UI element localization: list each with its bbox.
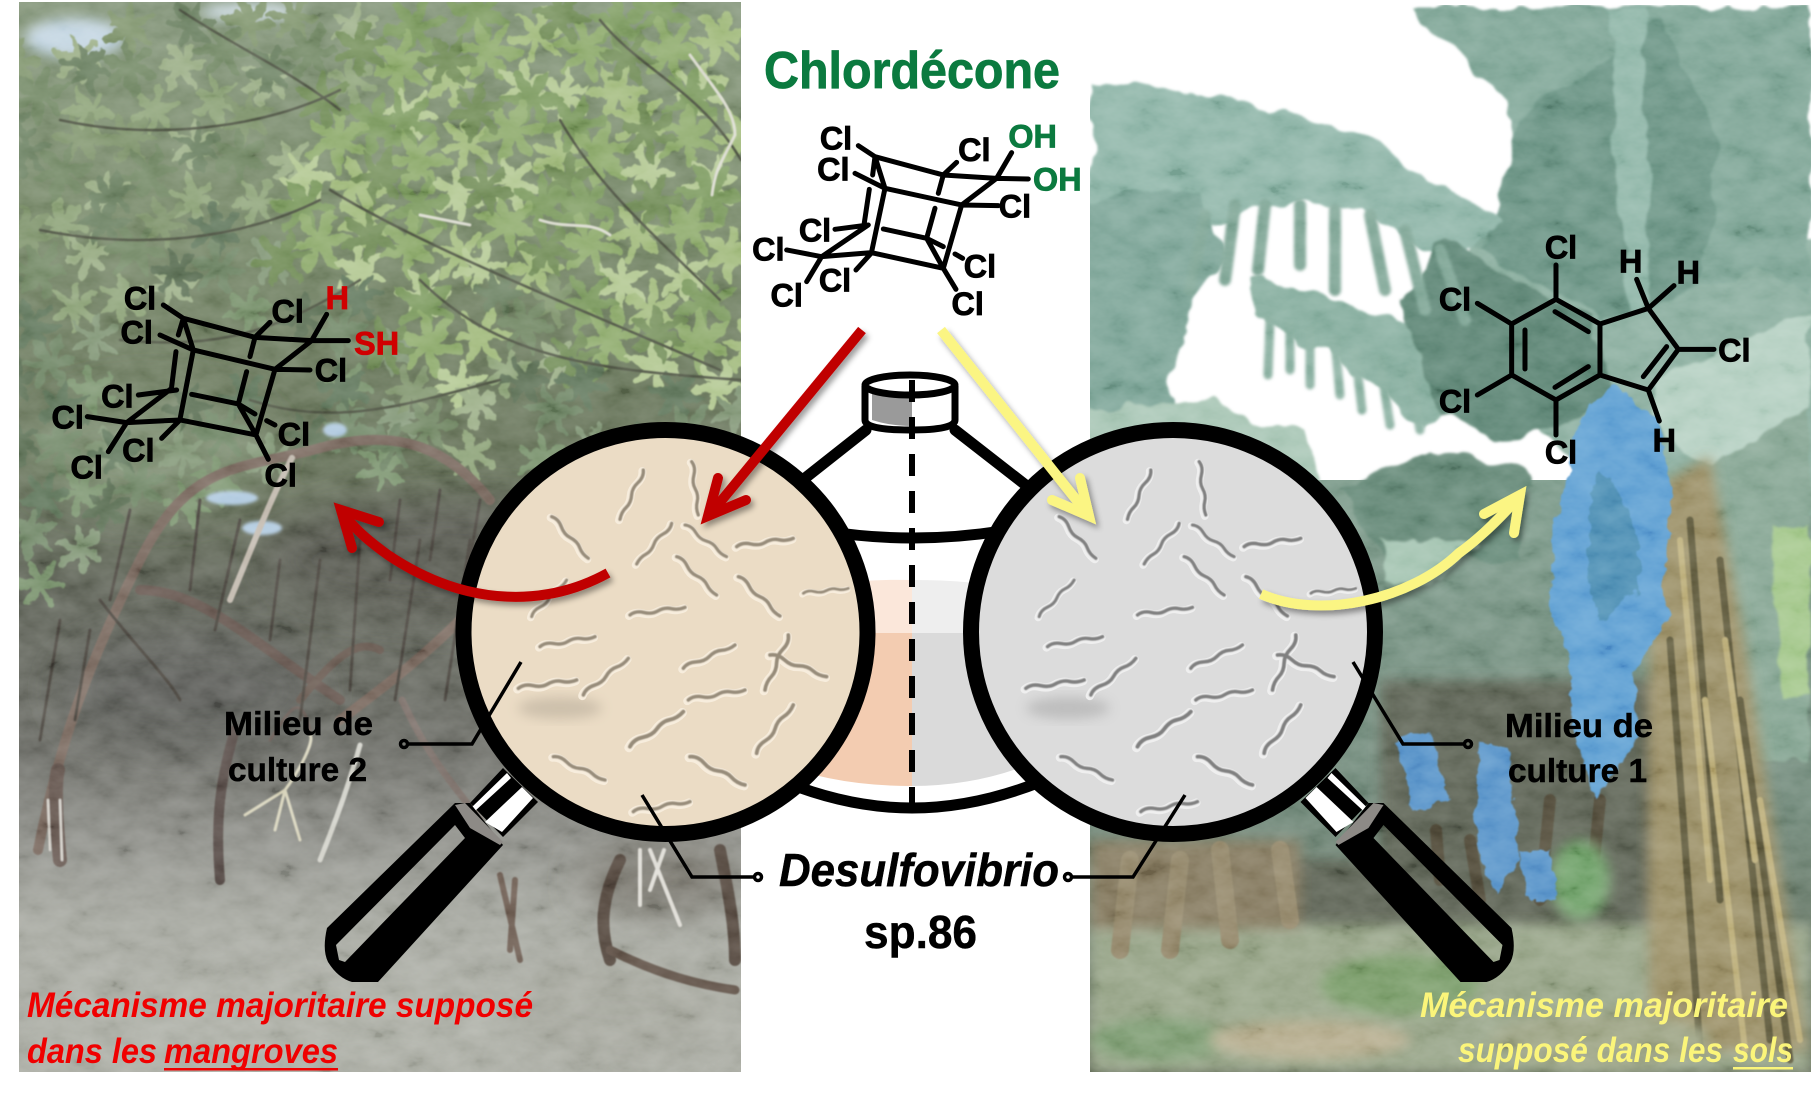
molecule: mangrove product with SH: Cl [122,433,154,469]
icon: left magnifier handle [325,768,538,982]
soft tonal masses of shadows [28,388,741,932]
mangrove roots [38,440,735,990]
molecule: mangrove product with SH: H [326,280,349,316]
arrow: yellow curved out of right lens [1261,495,1520,605]
label: Desulfovibrio sp.86: Desulfovibrio [779,844,1059,896]
molecule: chlordecone [752,119,1082,322]
bottle cap [872,392,912,426]
molecule: mangrove product with SH: Cl [315,353,347,389]
molecule: mangrove product with SH: Cl [271,293,304,329]
molecule: soil product indene [1439,229,1750,470]
caption: red mangrove mechanism [27,986,533,1071]
liquid right [912,580,1060,640]
molecule: mangrove product with SH: Cl [70,449,103,485]
arrow: red curved out of left lens [341,510,608,597]
label: milieu de culture 2: culture 2 [228,751,367,788]
molecule: soil product indene: Cl [1439,384,1471,420]
label: milieu de culture 2 [224,705,373,788]
bottle [745,375,1060,808]
molecule: soil product indene: Cl [1545,229,1577,265]
label: milieu de culture 1 [1505,707,1653,789]
photo grain [1090,5,1811,1072]
molecule: mangrove product with SH [51,280,399,494]
icon: right magnifier handle [1300,768,1514,982]
sky patch [25,3,300,58]
caption: red mangrove mechanism: Mécanisme majoritaire supposé [27,986,533,1025]
dashed line [909,380,915,808]
molecule: chlordecone: Cl [819,263,851,299]
molecule: mangrove product with SH: Cl [51,399,84,435]
arrow: yellow straight into right lens [941,330,1089,516]
torn frond strips [1190,205,1465,430]
label: Desulfovibrio sp.86: sp.86 [864,906,977,958]
molecule: chlordecone: Cl [958,132,990,168]
molecule: chlordecone: Cl [820,120,852,156]
banana trunks detail [1120,520,1800,1060]
caption: yellow soil mechanism: supposé dans les [1458,1031,1723,1070]
callout leader: Desulfovibrio left [642,795,762,880]
panel: left magnifier lens, culture medium 2 [464,430,868,834]
lower dark undergrowth base [1090,480,1811,1072]
label: milieu de culture 1: culture 1 [1508,752,1647,789]
caption: yellow soil mechanism: sols [1733,1031,1793,1070]
molecule: soil product indene: H [1677,254,1700,290]
molecule: soil product indene: H [1619,243,1642,279]
molecule: mangrove product with SH: Cl [124,280,156,316]
title: Chlordécone [764,42,1060,100]
molecule: mangrove product with SH: Cl [278,417,310,453]
blue banana bags [1395,385,1672,900]
label: milieu de culture 1: Milieu de [1505,707,1653,744]
molecule: soil product indene: Cl [1545,434,1577,470]
canopy leaves [19,2,741,608]
molecule: mangrove product with SH: Cl [120,314,153,350]
molecule: soil product indene: Cl [1718,333,1750,369]
banana leaves [1070,7,1818,760]
bottle outline [785,430,1040,808]
branches through the canopy [40,10,741,413]
molecule: mangrove product with SH: Cl [264,458,297,494]
panel: banana plantation photo background [1070,5,1818,1072]
molecule: mangrove product with SH: SH [354,325,399,361]
molecule: chlordecone: Cl [951,286,984,322]
molecule: soil product indene: Cl [1439,282,1471,318]
undergrowth and trunks [1090,456,1811,1072]
arrow: red straight into left lens [708,330,862,516]
molecule: chlordecone: Cl [770,278,803,314]
molecule: chlordecone: Cl [964,249,996,285]
callout leader: Desulfovibrio right [1064,795,1185,880]
molecule: mangrove product with SH: Cl [101,379,133,415]
callout leader: milieu de culture 2 [400,662,521,748]
water glimpses [206,423,347,535]
caption: yellow soil mechanism: Mécanisme majoritaire [1420,986,1788,1025]
photo grain [19,2,741,1072]
molecule: soil product indene: H [1653,423,1676,459]
molecule: chlordecone: Cl [799,213,831,249]
label: milieu de culture 2: Milieu de [224,705,373,742]
panel: mangrove photo background [19,2,741,1072]
callout leader: milieu de culture 1 [1353,662,1472,748]
panel: right magnifier lens, culture medium 1 [971,430,1375,834]
molecule: chlordecone: OH [1008,119,1057,155]
label: Desulfovibrio sp.86 [779,844,1059,958]
molecule: chlordecone: Cl [817,152,849,188]
molecule: chlordecone: OH [1033,162,1082,198]
caption: yellow soil mechanism [1420,986,1793,1070]
ground vegetation [1090,840,1710,1068]
caption: red mangrove mechanism: mangroves [164,1032,338,1071]
liquid left [745,580,912,640]
caption: red mangrove mechanism: dans les [27,1032,157,1071]
molecule: chlordecone: Cl [999,189,1031,225]
molecule: chlordecone: Cl [752,232,785,268]
